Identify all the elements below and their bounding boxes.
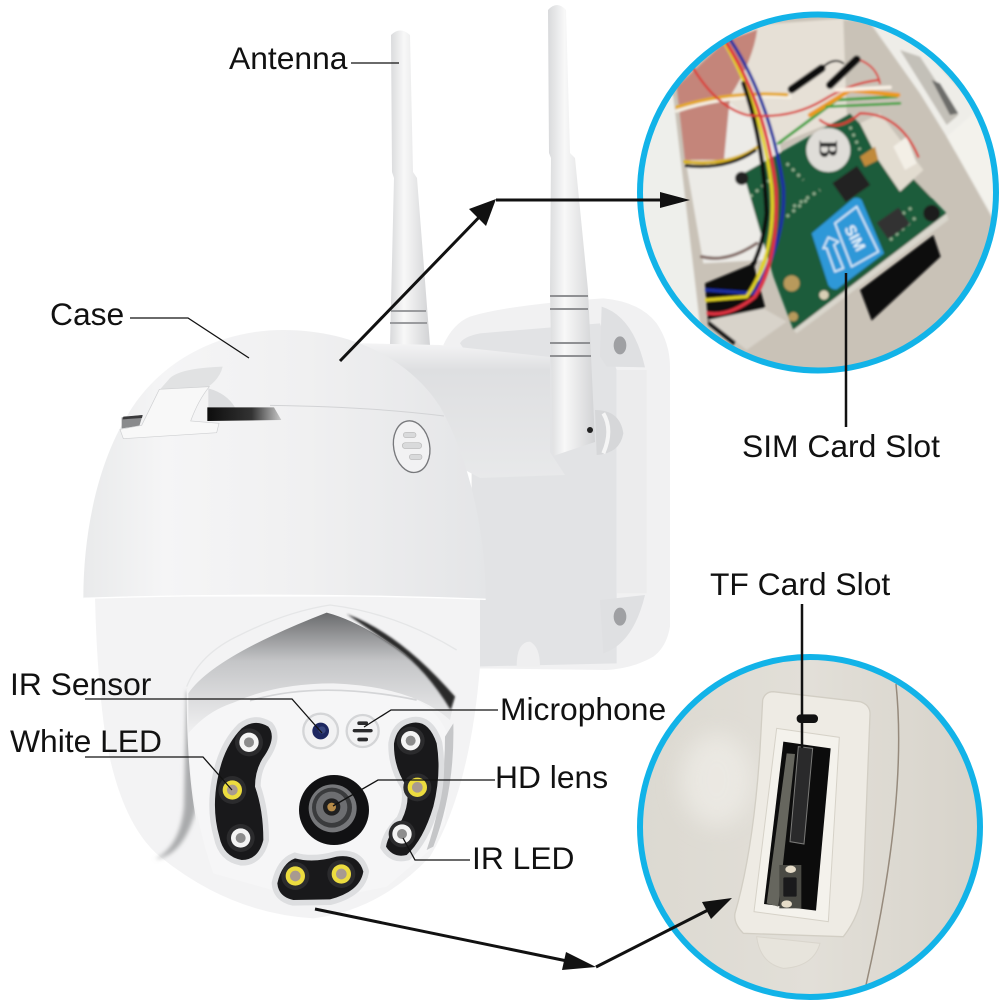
slot frame: [754, 728, 839, 922]
label: White LED: White LED: [10, 723, 162, 759]
B sticker: [806, 128, 850, 172]
left antenna: [390, 30, 430, 345]
board components: [750, 127, 917, 240]
panel: SIM card slot photo: [630, 0, 1000, 370]
side button: [389, 418, 434, 475]
dome: [83, 330, 486, 599]
IR sensor: [303, 714, 338, 748]
camera face with LEDs: [215, 714, 439, 900]
label: IR LED: IR LED: [472, 840, 574, 876]
leader line: TF card slot: [801, 604, 803, 748]
finger: [677, 29, 757, 160]
right antenna: [548, 5, 595, 456]
lower screw hole: [600, 595, 645, 653]
leader line: case: [130, 318, 249, 358]
vent flap: [120, 387, 219, 439]
HD lens: [299, 775, 369, 845]
right white case: [872, 26, 992, 217]
leader line: white LED: [85, 757, 232, 790]
vent recess: [160, 367, 223, 389]
label: IR Sensor: IR Sensor: [10, 666, 152, 702]
leader line: microphone: [364, 710, 498, 727]
black foam: [860, 235, 941, 321]
white LED and IR LED panel left: [215, 723, 272, 860]
tray recess: [735, 692, 870, 937]
white LED and IR LED panel right: [386, 722, 439, 856]
dark wedge: [347, 614, 455, 710]
leader line: antenna: [351, 62, 399, 64]
wires: [677, 39, 918, 314]
shadow recess: [188, 613, 455, 733]
leader line: IR LED: [403, 838, 470, 860]
arrow: case to SIM photo: [340, 192, 690, 361]
arrow: base to TF photo: [315, 898, 732, 970]
hinge: [595, 410, 623, 455]
upper screw hole: [600, 307, 645, 367]
white wall left: [643, 94, 701, 322]
panel: TF card slot photo: [640, 657, 980, 997]
microphone holes: [347, 715, 379, 747]
lower housing and face: [95, 597, 480, 918]
white LED panel bottom: [277, 856, 363, 900]
icon: camera illustration: [83, 5, 670, 918]
connector: [860, 113, 923, 192]
label: SIM Card Slot: SIM Card Slot: [742, 428, 940, 464]
panel: SIM card slot photo: B: [813, 140, 843, 158]
leader line: HD lens: [333, 780, 495, 806]
bracket arm: [350, 343, 565, 478]
right rim shading: [427, 723, 453, 850]
leader line: IR sensor: [85, 699, 322, 733]
SIM sticker: [812, 198, 884, 289]
face plate: [188, 690, 452, 902]
green board: [743, 113, 947, 330]
face opening: [187, 612, 458, 900]
label: HD lens: HD lens: [495, 759, 608, 795]
label: Case: Case: [50, 296, 124, 332]
wall mount bracket: [443, 298, 670, 670]
label: Antenna: Antenna: [229, 40, 348, 76]
label: Microphone: Microphone: [500, 691, 666, 727]
leader line: SIM card slot: [845, 273, 847, 427]
panel: SIM card slot photo: SIM: [840, 222, 868, 254]
label: TF Card Slot: TF Card Slot: [710, 566, 890, 602]
